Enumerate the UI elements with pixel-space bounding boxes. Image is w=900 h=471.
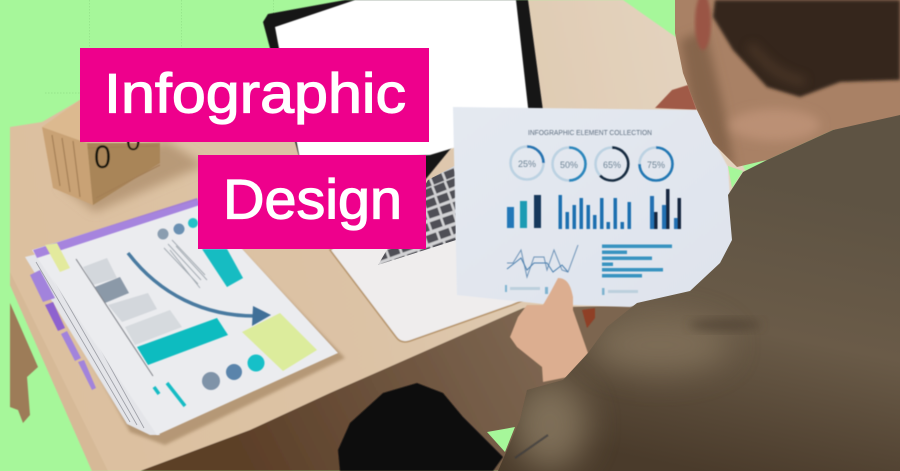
lower sheets xyxy=(25,252,160,435)
legends xyxy=(505,285,638,295)
title text line one: Infographic xyxy=(104,62,406,124)
report title: INFOGRAPHIC ELEMENT COLLECTION xyxy=(528,130,652,137)
top sheet xyxy=(32,200,338,435)
sleeve seam xyxy=(515,435,548,458)
teal accents xyxy=(154,383,185,406)
title text line two: Design xyxy=(223,168,402,230)
bar chart group one xyxy=(507,195,541,228)
trousers xyxy=(338,383,503,471)
laptop bezel xyxy=(263,0,544,180)
shirt xyxy=(490,110,900,471)
donut labels: 25% xyxy=(518,159,536,169)
far hand xyxy=(655,85,697,110)
near hand xyxy=(510,278,588,382)
desk underside and leg xyxy=(10,303,38,423)
sleeve light xyxy=(512,380,588,470)
small sticky note xyxy=(45,243,70,272)
laptop base xyxy=(330,170,620,342)
purple stripe xyxy=(33,198,200,258)
hair highlights xyxy=(750,45,805,82)
laptop screen xyxy=(275,0,530,160)
block numbers: 0 xyxy=(94,139,111,175)
curved arrow xyxy=(128,253,271,326)
block shadow xyxy=(60,140,205,212)
title box: Infographic xyxy=(80,48,429,142)
donut labels: 75% xyxy=(647,160,665,170)
keyboard xyxy=(378,166,456,265)
paper sheet xyxy=(453,107,733,307)
green gap at shoulder xyxy=(728,166,743,188)
neck highlight xyxy=(730,109,820,141)
title box: Design xyxy=(198,155,426,249)
wooden calendar block: 0 xyxy=(126,126,140,156)
hair xyxy=(713,0,900,97)
large sticky note xyxy=(242,313,317,371)
teal panel xyxy=(202,249,243,287)
paper shadow xyxy=(36,208,345,445)
line chart xyxy=(507,245,578,277)
side of face shadow xyxy=(680,30,735,170)
laptop xyxy=(262,0,544,344)
far finger xyxy=(582,308,595,328)
donut labels: 65% xyxy=(603,160,621,170)
ear xyxy=(695,0,711,50)
paper text lines xyxy=(164,240,207,288)
donut labels xyxy=(518,159,665,170)
forearm light xyxy=(590,317,730,373)
donut labels: 50% xyxy=(560,160,578,170)
green gap xyxy=(487,427,515,452)
desk left side edge xyxy=(10,272,108,471)
fold shadow xyxy=(689,319,761,331)
wooden calendar block xyxy=(42,100,205,212)
bar chart group two xyxy=(558,195,631,229)
purple tabs xyxy=(30,270,96,390)
head and neck xyxy=(670,0,900,175)
horizontal bar chart xyxy=(602,244,672,278)
stack of papers on desk xyxy=(25,198,345,445)
bar chart group three xyxy=(650,189,681,229)
held report xyxy=(453,107,733,307)
paper circles xyxy=(158,218,264,390)
desk front dark edge xyxy=(140,300,640,471)
person xyxy=(490,0,900,471)
donut charts xyxy=(510,146,672,180)
paper bar chart xyxy=(76,258,228,376)
